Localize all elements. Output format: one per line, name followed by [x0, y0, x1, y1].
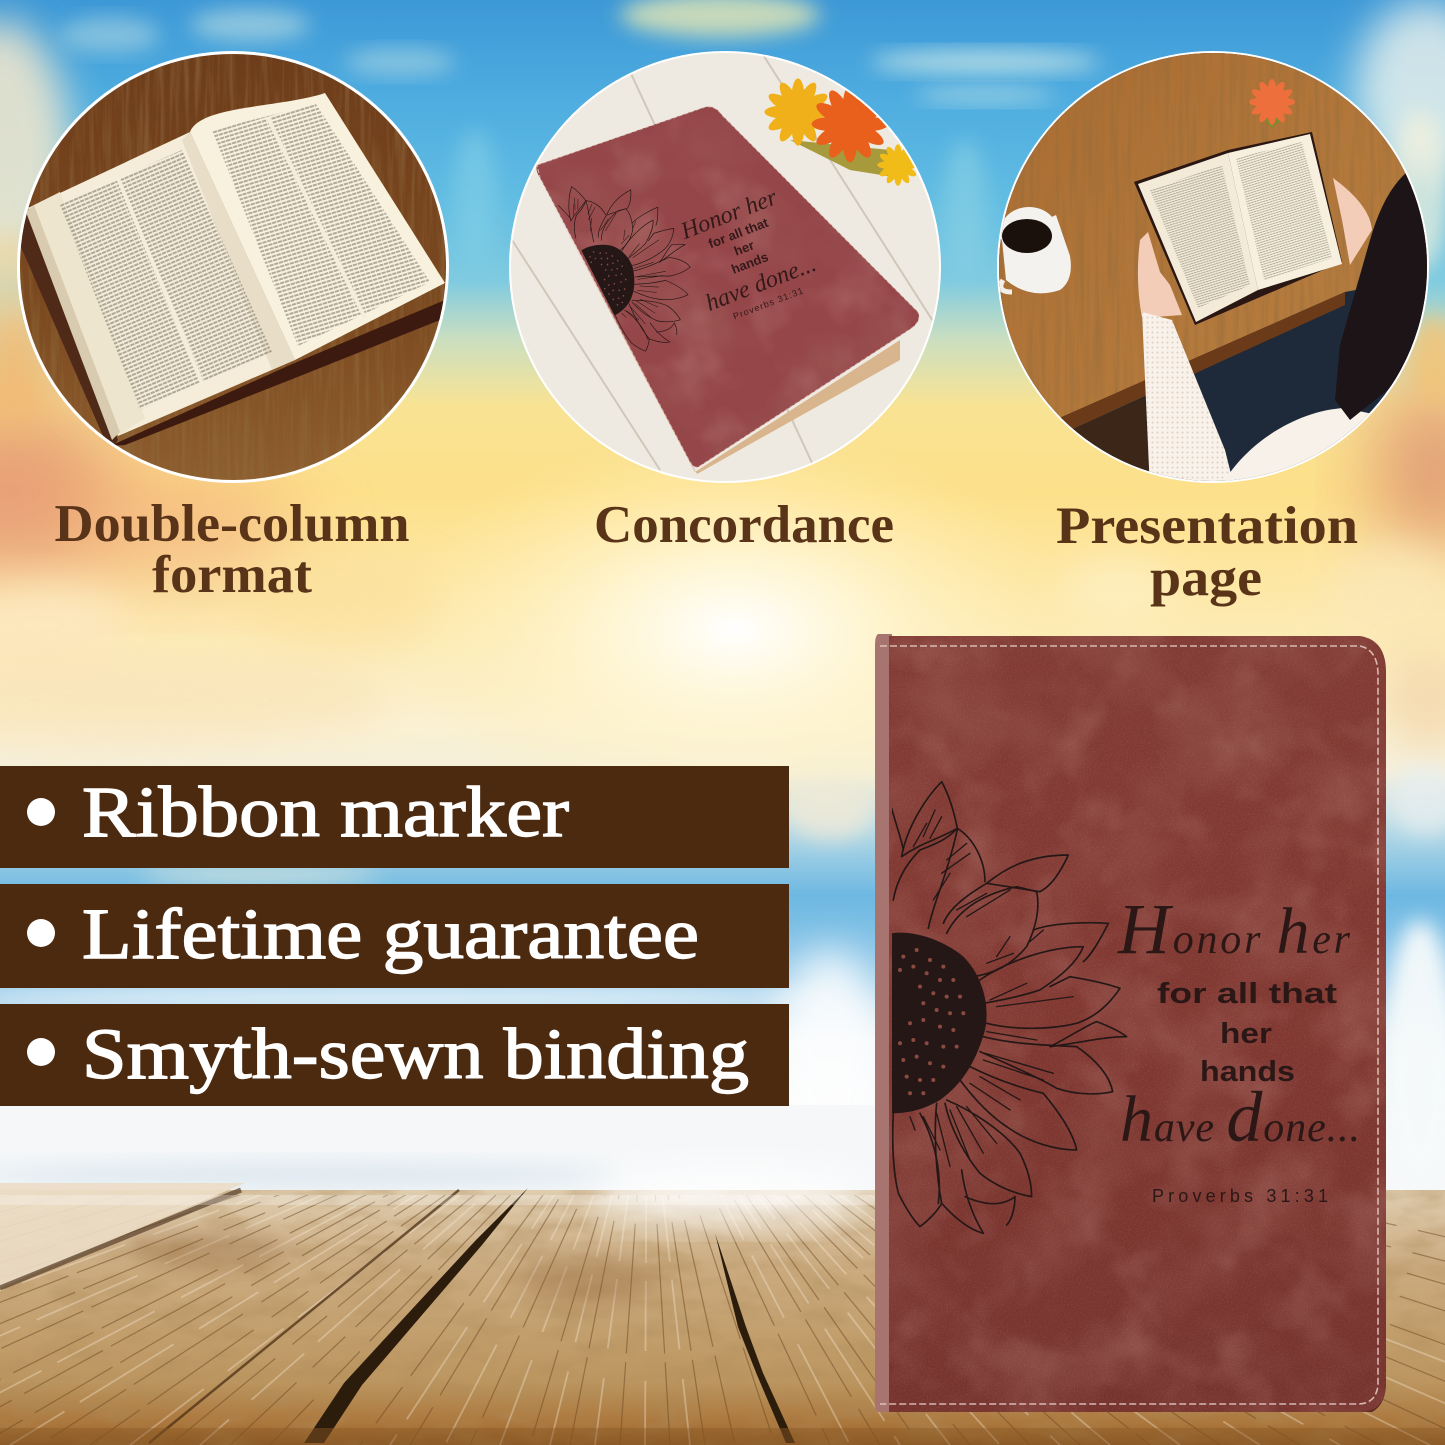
cover lettering: have done... [702, 251, 820, 317]
label: Smyth-sewn binding [82, 1014, 749, 1094]
cover lettering: hands [1200, 1056, 1295, 1088]
bullet [27, 798, 55, 826]
cover lettering: her [1220, 1018, 1272, 1050]
wooden table [0, 1183, 1445, 1445]
cover lettering: hands [729, 249, 770, 277]
photo circle: reader with presentation page [995, 50, 1435, 490]
leather Bible product [875, 634, 1386, 1412]
wood surface [15, 50, 455, 490]
photo circle: double-column Bible [15, 50, 455, 490]
photo circle: concordance cover [505, 50, 945, 490]
cover lettering: her [732, 237, 756, 259]
feature bar: lifetime guarantee [0, 884, 789, 988]
caption: double-column format [54, 495, 409, 604]
caption: double-column format: format [152, 546, 312, 604]
cover [880, 636, 1386, 1412]
label: Lifetime guarantee [82, 894, 699, 974]
cover lettering: have done... [1120, 1077, 1360, 1157]
small sunflower [558, 186, 691, 352]
cover lettering: Honor her [676, 184, 781, 245]
flowers [764, 78, 919, 186]
tilted cover [530, 100, 925, 475]
flower [1249, 79, 1295, 128]
open book [18, 93, 445, 452]
spine [875, 634, 892, 1412]
caption: presentation page [1056, 497, 1358, 607]
hands [1138, 178, 1372, 318]
cover lettering [681, 192, 816, 320]
open book in hands [1134, 132, 1342, 325]
bullet [27, 1038, 55, 1066]
caption: concordance: Concordance [594, 496, 894, 554]
cover lettering: for all that [706, 215, 771, 251]
bullet [27, 919, 55, 947]
sleeve and sweater [1142, 312, 1369, 481]
caption: presentation page: page [1150, 549, 1262, 607]
label: Ribbon marker [82, 772, 569, 852]
feature bar: ribbon marker [0, 766, 789, 868]
coffee mug [1000, 207, 1071, 293]
cover lettering: Honor her [1117, 889, 1351, 969]
table top [995, 50, 1435, 490]
white wood surface [505, 50, 945, 490]
cover lettering: for all that [1157, 978, 1337, 1010]
sunflower engraving [892, 782, 1127, 1233]
feature bar: smyth-sewn binding [0, 1004, 789, 1106]
book edge [537, 175, 900, 474]
cover lettering: Proverbs 31:31 [732, 285, 805, 322]
caption: presentation page: Presentation [1056, 497, 1358, 555]
cover lettering [1117, 889, 1360, 1206]
cover lettering: Proverbs 31:31 [1152, 1186, 1328, 1206]
hair [1335, 174, 1427, 420]
caption: double-column format: Double-column [54, 495, 409, 553]
